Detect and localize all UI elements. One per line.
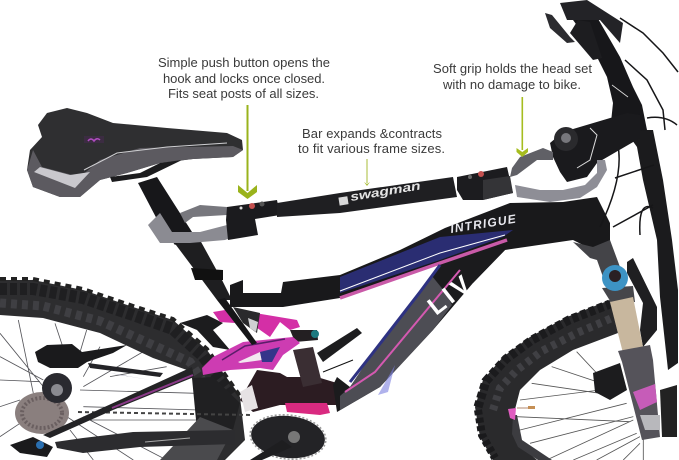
fork bbox=[573, 130, 678, 440]
chain bbox=[78, 412, 250, 415]
blue graphic on top tube bbox=[340, 230, 513, 293]
drivetrain bbox=[10, 344, 328, 460]
text: push button bbox=[158, 55, 330, 101]
left hook lower bbox=[148, 213, 247, 243]
chainstay bbox=[55, 430, 235, 453]
stem cap bbox=[554, 127, 578, 151]
arrow: push button bbox=[238, 105, 257, 199]
text: bar expands bbox=[298, 126, 445, 156]
callout: soft grip bbox=[433, 61, 592, 157]
shifter bbox=[570, 20, 602, 60]
bar clamp bbox=[560, 0, 623, 43]
bar brand text: swagman bbox=[349, 178, 422, 204]
text: soft grip bbox=[433, 61, 592, 92]
saddle logo bbox=[84, 136, 104, 143]
stanchion bbox=[610, 297, 643, 353]
right hook lower bbox=[515, 160, 607, 202]
pink linkage upper bbox=[213, 310, 235, 323]
arrow: bar expands bbox=[364, 159, 370, 186]
adapter bar bbox=[148, 148, 607, 243]
seat tube bbox=[173, 240, 260, 345]
text: bar expands: to fit various frame sizes. bbox=[298, 141, 445, 156]
far fork leg bbox=[625, 130, 678, 370]
crown bbox=[573, 240, 620, 277]
frame logo LIV: LIV bbox=[422, 270, 476, 321]
left handle bbox=[226, 200, 280, 240]
saddle rails bbox=[110, 160, 182, 182]
top tube bbox=[230, 197, 610, 307]
text: soft grip: with no damage to bike. bbox=[442, 77, 581, 92]
frame: top tube and down tube bbox=[230, 197, 610, 412]
seat post bbox=[138, 177, 192, 245]
stem bbox=[550, 113, 640, 182]
down tube grey panel bbox=[340, 276, 452, 410]
blue top cap bbox=[602, 265, 628, 291]
text: soft grip: Soft grip holds the head set bbox=[433, 61, 592, 76]
rear wheel bbox=[0, 279, 245, 460]
text: push button: Simple push button opens the bbox=[158, 55, 330, 70]
cassette bbox=[15, 392, 69, 434]
seat stay bbox=[43, 315, 230, 438]
rear hub bbox=[42, 373, 72, 403]
right hook upper bbox=[510, 148, 553, 177]
text: push button: Fits seat posts of all sizes. bbox=[168, 86, 319, 101]
dropout bbox=[10, 437, 53, 457]
brake lever bbox=[545, 13, 575, 43]
frame logo INTRIGUE: INTRIGUE bbox=[449, 212, 518, 236]
fork arc rotor bbox=[627, 258, 657, 347]
text: bar expands: Bar expands &contracts bbox=[302, 126, 442, 141]
left hook upper bbox=[180, 205, 227, 223]
callout: seat post button bbox=[158, 55, 330, 199]
down tube bbox=[333, 245, 505, 412]
rear derailleur bbox=[35, 344, 127, 368]
steerer tube bbox=[573, 17, 647, 132]
pink linkage lower bbox=[202, 337, 300, 375]
callout: bar expands bbox=[298, 126, 445, 186]
pink stripe bbox=[340, 240, 507, 298]
lower leg bbox=[618, 345, 660, 440]
arrow: soft grip bbox=[516, 97, 528, 157]
brake caliper bbox=[593, 363, 627, 400]
front wheel bbox=[475, 300, 643, 460]
fork upper bbox=[602, 286, 635, 304]
pink bottom mount bbox=[285, 403, 330, 415]
handlebar and stem bbox=[545, 0, 678, 235]
crank bbox=[250, 440, 292, 460]
saddle grey side bbox=[27, 146, 243, 197]
chainring bbox=[249, 412, 327, 460]
rear shock bbox=[293, 347, 322, 387]
frame: crank-side strut bbox=[317, 328, 362, 372]
right handle bbox=[457, 167, 513, 200]
rear suspension bbox=[202, 310, 337, 415]
main bar tube bbox=[277, 177, 457, 217]
text: push button: hook and locks once closed. bbox=[163, 71, 325, 86]
saddle bbox=[27, 108, 243, 197]
